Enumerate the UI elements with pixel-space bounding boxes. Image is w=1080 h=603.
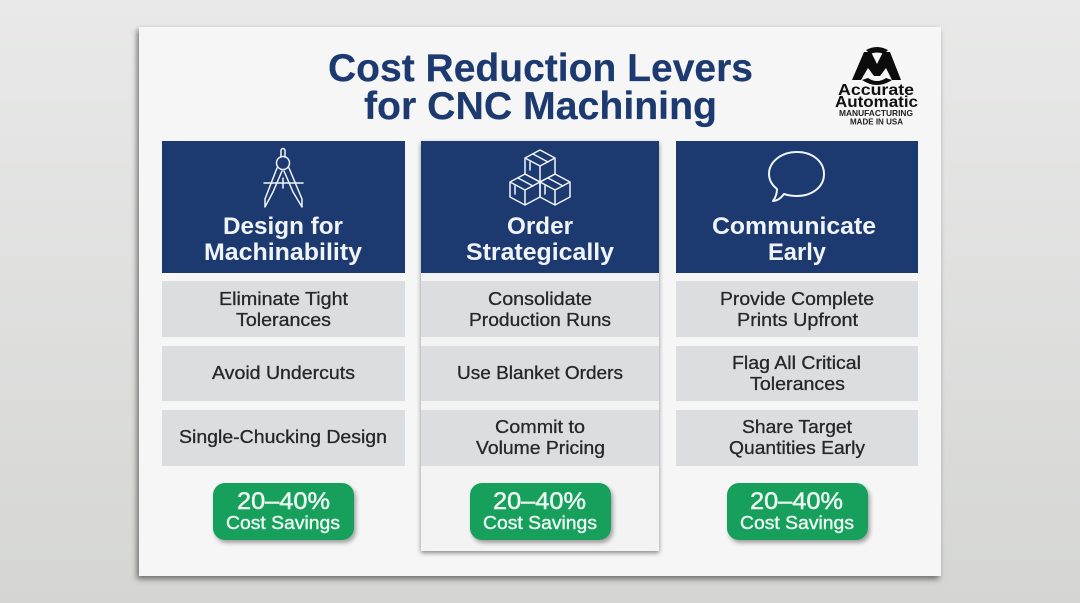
- panel: poster card: [139, 27, 941, 576]
- header: Design for Machinability: [162, 141, 405, 273]
- list item: Share Target Quantities Early: Share Target: [742, 416, 852, 437]
- list item: Avoid Undercuts: Avoid Undercuts: [212, 362, 355, 383]
- icon: stacked boxes: [510, 150, 570, 205]
- list item: Eliminate Tight Tolerances: [162, 281, 405, 337]
- list item: Avoid Undercuts: [162, 346, 405, 401]
- panel: Design for Machinability: [162, 141, 405, 540]
- list item: Consolidate Production Runs: [421, 281, 659, 337]
- header: Order Strategically: Order: [507, 213, 573, 240]
- list item: Flag All Critical Tolerances: Flag All Critical: [732, 352, 861, 373]
- list item: Consolidate Production Runs: Production Runs: [469, 309, 611, 330]
- logo: Accurate Automatic: MANUFACTURING: [839, 108, 913, 118]
- list item: Flag All Critical Tolerances: [676, 346, 918, 401]
- list item: Use Blanket Orders: Use Blanket Orders: [457, 362, 623, 383]
- badge: 20–40% Cost Savings: Cost Savings: [483, 512, 597, 533]
- badge: 20–40% Cost Savings: Cost Savings: [226, 512, 340, 533]
- logo: Accurate Automatic: MADE IN USA: [850, 116, 903, 126]
- badge: 20–40% Cost Savings: 20–40%: [237, 488, 330, 515]
- header: Communicate Early: [676, 141, 918, 273]
- list item: Commit to Volume Pricing: Commit to: [495, 416, 585, 437]
- panel: Communicate Early: [676, 141, 918, 540]
- icon: logo emblem: [852, 47, 901, 85]
- list item: Provide Complete Prints Upfront: Provide Complete: [720, 288, 874, 309]
- list item: Share Target Quantities Early: Quantities Early: [729, 437, 866, 458]
- list item: Eliminate Tight Tolerances: Eliminate Tight: [219, 288, 348, 309]
- list item: Commit to Volume Pricing: Volume Pricing: [476, 437, 605, 458]
- header: Order Strategically: [421, 141, 659, 273]
- list item: Single-Chucking Design: [162, 410, 405, 466]
- title: Cost Reduction Levers: [328, 47, 753, 90]
- logo: Accurate Automatic: Accurate: [838, 82, 914, 99]
- header: Design for Machinability: Machinability: [204, 239, 363, 266]
- header: Design for Machinability: Design for: [223, 213, 343, 240]
- badge: 20–40% Cost Savings: Cost Savings: [740, 512, 854, 533]
- list item: Provide Complete Prints Upfront: [676, 281, 918, 337]
- logo: Accurate Automatic: Automatic: [835, 94, 918, 111]
- title: for CNC Machining: [364, 85, 717, 128]
- header: Communicate Early: Early: [768, 239, 827, 266]
- list item: Commit to Volume Pricing: [421, 410, 659, 466]
- badge: 20–40% Cost Savings: [470, 483, 611, 540]
- header: Order Strategically: Strategically: [466, 239, 615, 266]
- list item: Consolidate Production Runs: Consolidate: [488, 288, 592, 309]
- logo: Accurate Automatic: [835, 47, 918, 126]
- icon: drafting compass: [264, 148, 303, 207]
- list item: Use Blanket Orders: [421, 346, 659, 401]
- panel: Order Strategically: [421, 141, 659, 551]
- list item: Share Target Quantities Early: [676, 410, 918, 466]
- list item: Eliminate Tight Tolerances: Tolerances: [236, 309, 331, 330]
- header: Communicate Early: Communicate: [712, 213, 876, 240]
- list item: Single-Chucking Design: Single-Chucking Design: [179, 426, 387, 447]
- list item: Provide Complete Prints Upfront: Prints Upfront: [737, 309, 858, 330]
- list item: Flag All Critical Tolerances: Tolerances: [750, 373, 845, 394]
- badge: 20–40% Cost Savings: 20–40%: [750, 488, 843, 515]
- badge: 20–40% Cost Savings: 20–40%: [493, 488, 586, 515]
- badge: 20–40% Cost Savings: [727, 483, 868, 540]
- icon: speech bubble: [769, 152, 824, 201]
- badge: 20–40% Cost Savings: [213, 483, 354, 540]
- title: [328, 47, 753, 128]
